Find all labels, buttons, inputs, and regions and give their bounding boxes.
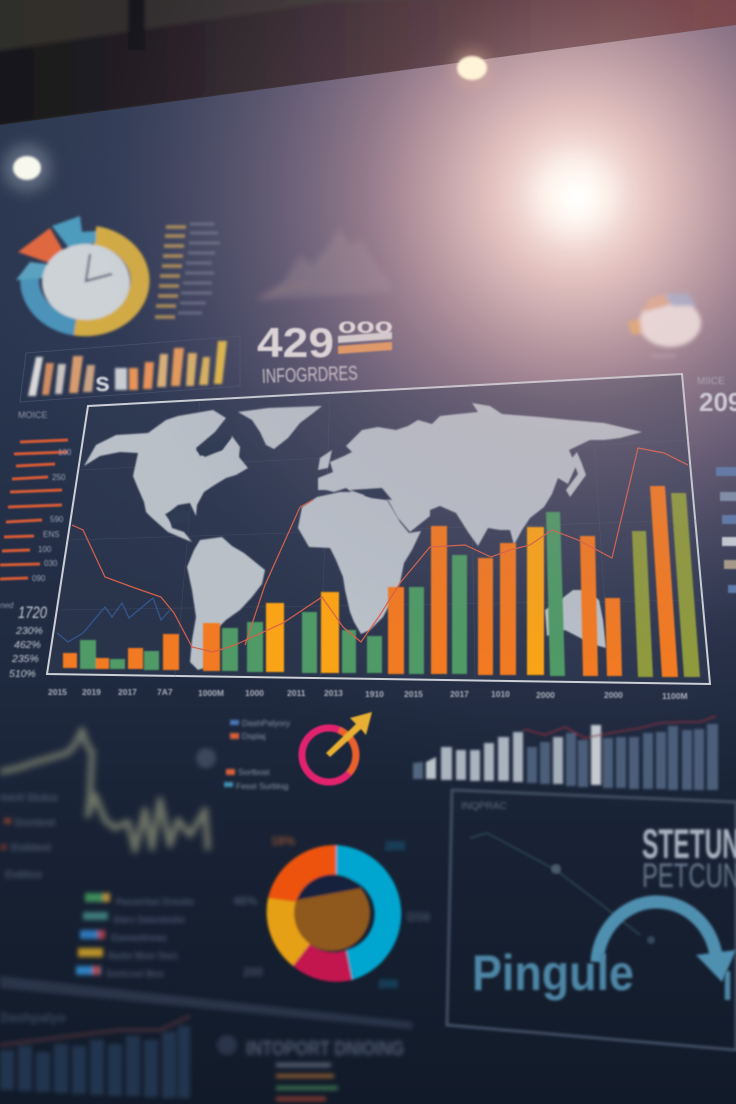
blurred left text: Dsntest [15,817,56,829]
clock face [42,244,130,320]
stat circles: ooo [338,315,393,338]
x axis labels: 1000M [198,688,224,698]
small legend with lens dot: Sortbost [238,767,270,777]
x axis labels: 2019 [82,687,101,697]
arrow [326,712,372,757]
bar chart, lower right [413,716,718,790]
bottom left panel [0,976,412,1098]
stat: 429: 429 [257,319,334,366]
letter in bars: s [95,367,110,397]
panel: clock donut chart [16,216,140,327]
left stats: ned [0,601,14,610]
donut labels [233,834,431,991]
right letter: l [722,965,733,1009]
left stats: 510% [9,668,36,680]
legend blurred, lower left: Sortcost Bos [106,969,164,980]
left list of bars: 590 [50,515,64,524]
legend blurred, lower left: Raster Bluer Stars [108,951,178,962]
spotlight: ceiling [452,48,492,88]
stat: 429 [257,315,393,366]
Japan [566,452,586,497]
spotlight: sun flare [539,159,611,231]
Hudson bay and seas [165,436,392,524]
right side column: MIICE [697,376,725,387]
left list of bars: MOICE [18,410,48,420]
left list of bars: 030 [44,559,58,568]
main donut chart [233,834,431,991]
blurred bars [0,1016,190,1098]
arc arrow [597,902,736,982]
donut labels: 46% [233,894,257,908]
x axis labels: 2017 [118,687,137,697]
left list of bars [0,410,72,583]
x axis labels: 2000 [536,690,555,700]
panel: world map chart [47,374,710,684]
pie chart top right [628,293,701,356]
legend blurred, lower left: Dasastreas [111,933,167,944]
blurred left text: ment Stutus [0,792,58,804]
blurred left text: Dsbtos [5,869,42,881]
South America [187,537,265,670]
bottom center text [217,1035,404,1101]
legend blurred, lower left [76,893,194,980]
markers [551,864,561,874]
x axis labels: 2013 [324,688,343,698]
x axis labels: 1910 [365,689,384,699]
faint line chart [470,833,640,935]
pingule text: Pingule [472,945,634,1001]
donut labels: 200 [243,965,263,979]
left stats: 1720 [18,603,47,622]
background wall and ceiling beam [0,0,736,190]
North America [84,410,248,542]
x axis labels: 2015 [404,689,423,699]
donut labels: 200 [378,977,398,991]
x axis labels: 1010 [491,689,510,699]
small legend with lens dot: DashPalyory [242,718,291,728]
x axis labels: 1100M [662,691,688,701]
Africa [298,492,421,634]
x axis labels: 2017 [450,689,469,699]
x axis labels: 2011 [287,688,306,698]
spotlight: left [3,144,51,192]
small legend with lens dot: Dsplaj [242,731,266,741]
donut labels: DS6 [407,910,431,924]
x axis labels: 1000 [245,688,264,698]
area chart, faint [258,228,392,300]
blurred line chart, lower left [0,730,208,850]
panel: lower right [447,790,736,1050]
bottom center text: INTOPORT DNIOING [246,1038,404,1060]
legend blurred, lower left: Stars Datentesbe [113,915,185,926]
blue line [57,598,170,642]
x axis labels: 2015 [48,687,67,697]
bars [63,486,700,677]
Australia [545,590,606,648]
blurred left text [0,792,58,881]
chart frame [47,374,710,684]
left stats: 230% [15,625,43,637]
blurred left text: Dsbtest [11,842,52,854]
grid [60,380,703,682]
left list of bars: 100 [38,545,52,554]
left list of bars: 100 [58,448,72,457]
red trend line [72,448,688,652]
dark red trend line [523,716,716,738]
x axis labels: 7A7 [157,687,173,697]
panel heading small: INQPRAC [461,801,507,812]
left list of bars: 090 [32,574,46,583]
small legend with lens dot: Fesst Surblog [236,781,289,791]
left list of bars: 250 [52,473,66,482]
left stats [0,601,47,680]
left list of bars: ENS [43,530,59,539]
small legend with lens dot [196,718,291,791]
Eurasia [318,403,642,546]
legend blurred, lower left: Passentan Dveaite [116,897,194,908]
x axis labels: 2000 [604,690,623,700]
map continents [84,403,642,670]
left stats: 235% [11,653,39,665]
legend beside clock [155,224,220,317]
target ring with arrow [302,712,372,782]
panel: small bar row [20,336,240,402]
x axis labels [48,687,688,701]
left stats: 462% [14,639,41,651]
donut labels: 18% [271,834,295,848]
bottom left panel: Dashpalyo [0,1010,66,1025]
right side column [697,376,736,593]
Greenland [238,406,322,449]
donut labels: 200 [385,839,405,853]
UK [318,450,332,470]
subtitle: infographics: INFOGRDRES [261,363,358,388]
